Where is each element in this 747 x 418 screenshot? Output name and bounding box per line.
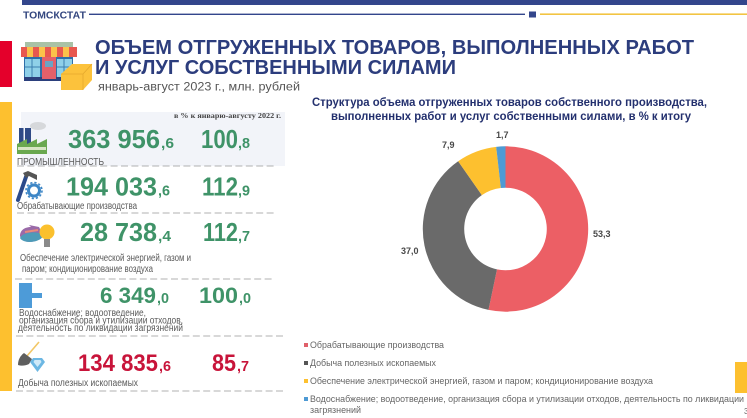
- legend: Обеспечение электрической энергией, газом и паром; кондиционирование воздуха: [310, 376, 654, 387]
- icon: gas flame and bulb: [20, 224, 54, 247]
- donut chart: [401, 130, 611, 312]
- row: energy: 112: [203, 219, 238, 247]
- value labels: 1,7: [496, 130, 509, 140]
- row: water: 100: [199, 283, 238, 308]
- right accent: yellow block: [735, 362, 747, 393]
- row: manufacturing: [17, 171, 250, 212]
- segment: water 1,7: [496, 146, 506, 188]
- segment: energy 7,9: [458, 147, 501, 195]
- row: water: Водоснабжение; водоотведение,: [19, 307, 146, 319]
- row: industry: ,8: [238, 135, 250, 152]
- row: mining: [18, 342, 249, 389]
- value labels: 53,3: [593, 229, 611, 239]
- left accent: yellow bar: [0, 102, 12, 391]
- subtitle: январь-август 2023 г., млн. рублей: [98, 82, 300, 94]
- left accent: red block: [0, 41, 12, 87]
- header band: [22, 0, 747, 22]
- row: water: ,0: [157, 290, 169, 307]
- icon: factory: [17, 122, 47, 154]
- legend: Добыча полезных ископаемых: [310, 358, 436, 369]
- icon: shop with box: [21, 42, 92, 90]
- segment: mining 37,0: [423, 161, 497, 310]
- row: mining: 85: [212, 350, 236, 377]
- row: energy: 28 738: [80, 219, 157, 247]
- icon: water pipe: [19, 283, 42, 308]
- row: industry: ПРОМЫШЛЕННОСТЬ: [17, 157, 104, 168]
- row: energy: ,7: [238, 228, 250, 245]
- icon: hammer and gear: [18, 171, 42, 200]
- row: manufacturing: ,9: [238, 182, 250, 200]
- row: mining: 134 835: [78, 350, 158, 377]
- row: water: организация сбора и утилизации отходов,: [19, 314, 183, 326]
- row: energy: [20, 219, 250, 275]
- value labels: 7,9: [442, 140, 455, 150]
- title: И УСЛУГ СОБСТВЕННЫМИ СИЛАМИ: [95, 56, 456, 79]
- header band: ТОМСКСТАТ: [23, 10, 86, 22]
- row: energy: Обеспечение электрической энергией, газом и: [20, 252, 191, 264]
- chart heading: Структура объема отгруженных товаров собственного производства,: [312, 95, 707, 109]
- row: manufacturing: 194 033: [66, 174, 157, 202]
- row: energy: ,4: [158, 228, 172, 245]
- row: industry: ,6: [161, 135, 174, 152]
- title: [95, 36, 694, 79]
- row: manufacturing: Обрабатывающие производства: [17, 200, 137, 212]
- column note: в % к январю-августу 2022 г.: [174, 111, 281, 120]
- value labels: 37,0: [401, 246, 419, 256]
- chart heading: [312, 95, 707, 123]
- row: manufacturing: ,6: [158, 182, 170, 200]
- value labels: [401, 130, 611, 256]
- chart heading: выполненных работ и услуг собственными силами, в % к итогу: [331, 109, 691, 123]
- row: industry: [17, 122, 250, 168]
- row: mining: ,7: [237, 358, 249, 375]
- row: manufacturing: 112: [202, 174, 238, 202]
- row: water: деятельность по ликвидации загрязнений: [18, 323, 183, 334]
- row: mining: ,6: [159, 358, 171, 375]
- legend: [304, 340, 744, 416]
- title: ОБЪЕМ ОТГРУЖЕННЫХ ТОВАРОВ, ВЫПОЛНЕННЫХ РАБОТ: [95, 36, 694, 59]
- row: industry: 363 956: [68, 126, 160, 154]
- row: energy: паром; кондиционирование воздуха: [22, 264, 153, 275]
- panel: industry highlight: [21, 112, 285, 166]
- legend: Обрабатывающие производства: [310, 340, 445, 351]
- row: mining: Добыча полезных ископаемых: [18, 377, 138, 389]
- row: water: [18, 283, 251, 334]
- row: water: 6 349: [100, 283, 156, 308]
- legend: загрязнений: [310, 405, 361, 416]
- segment: manufacturing 53,3: [488, 146, 588, 312]
- icon: shovel and diamond: [18, 342, 45, 372]
- row: industry: 100: [201, 126, 238, 154]
- row: water: ,0: [239, 290, 251, 307]
